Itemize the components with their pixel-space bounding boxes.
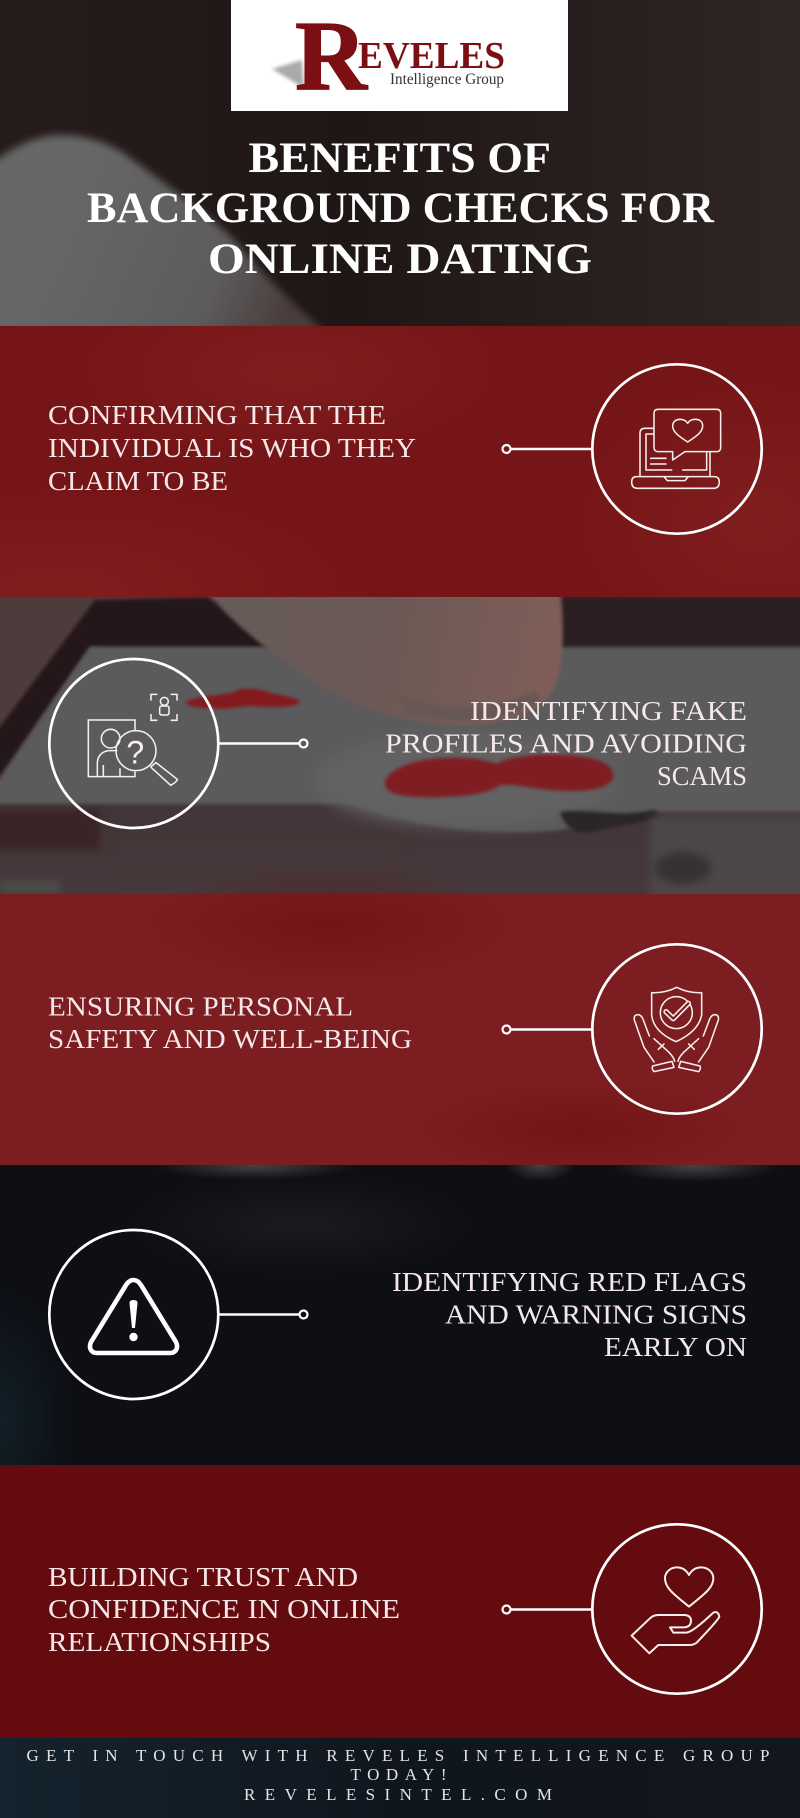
background: red band five [0, 1465, 800, 1738]
title [87, 135, 715, 283]
title: BACKGROUND CHECKS FOR [87, 185, 715, 232]
logo panel: EVELES [358, 35, 505, 77]
logo panel: Intelligence Group [390, 71, 504, 88]
text: red flags: IDENTIFYING RED FLAGS [392, 1266, 747, 1297]
connector [502, 1026, 592, 1034]
footer call to action [26, 1746, 769, 1804]
text: confirming identity: INDIVIDUAL IS WHO THEY [48, 432, 416, 463]
title: BENEFITS OF [248, 135, 551, 182]
background: red band three [0, 865, 800, 1180]
panel: benefit two [49, 659, 747, 828]
connector [219, 740, 308, 748]
text: personal safety: ENSURING PERSONAL [48, 990, 353, 1022]
footer call to action: GET IN TOUCH WITH REVELES INTELLIGENCE GROUP [26, 1746, 769, 1765]
panel: benefit four [49, 1230, 747, 1399]
logo wordmark: R [295, 0, 369, 111]
text: red flags: AND WARNING SIGNS [445, 1299, 747, 1330]
connector [502, 445, 592, 453]
text: fake profiles: SCAMS [657, 760, 747, 791]
text: building trust: CONFIDENCE IN ONLINE [48, 1593, 400, 1624]
panel: benefit five [48, 1524, 762, 1694]
logo shadow [272, 60, 304, 88]
text: red flags: EARLY ON [604, 1331, 747, 1362]
icon: profile under magnifier: ? [126, 735, 144, 771]
text: fake profiles: PROFILES AND AVOIDING [385, 728, 747, 759]
text: fake profiles: IDENTIFYING FAKE [470, 695, 747, 726]
background: card photo band [0, 590, 800, 900]
icon: profile under magnifier [49, 659, 218, 828]
panel: benefit three [48, 944, 762, 1114]
background: red band one [0, 326, 800, 597]
footer call to action: REVELESINTEL.COM [244, 1785, 552, 1804]
text: fake profiles [385, 695, 747, 791]
background: header photo band [0, 0, 800, 332]
text: confirming identity [48, 399, 416, 496]
text: personal safety: SAFETY AND WELL-BEING [48, 1023, 412, 1054]
text: building trust [48, 1561, 400, 1657]
icon: hand holding heart [592, 1524, 762, 1694]
icon: laptop with heart message [592, 364, 762, 534]
background: dark band four [0, 1165, 771, 1465]
connector [219, 1310, 308, 1318]
icon: hands with shield [592, 944, 762, 1114]
logo panel [231, 0, 568, 111]
text: personal safety [48, 990, 412, 1054]
connector [502, 1606, 592, 1614]
text: confirming identity: CLAIM TO BE [48, 465, 228, 496]
footer call to action: TODAY! [350, 1765, 446, 1784]
text: building trust: RELATIONSHIPS [48, 1626, 271, 1657]
text: red flags [392, 1266, 747, 1362]
panel: benefit one [48, 364, 762, 534]
text: building trust: BUILDING TRUST AND [48, 1561, 358, 1592]
icon: warning triangle [49, 1230, 218, 1399]
text: confirming identity: CONFIRMING THAT THE [48, 399, 386, 430]
title: ONLINE DATING [208, 236, 592, 283]
background: footer band [0, 1738, 800, 1818]
